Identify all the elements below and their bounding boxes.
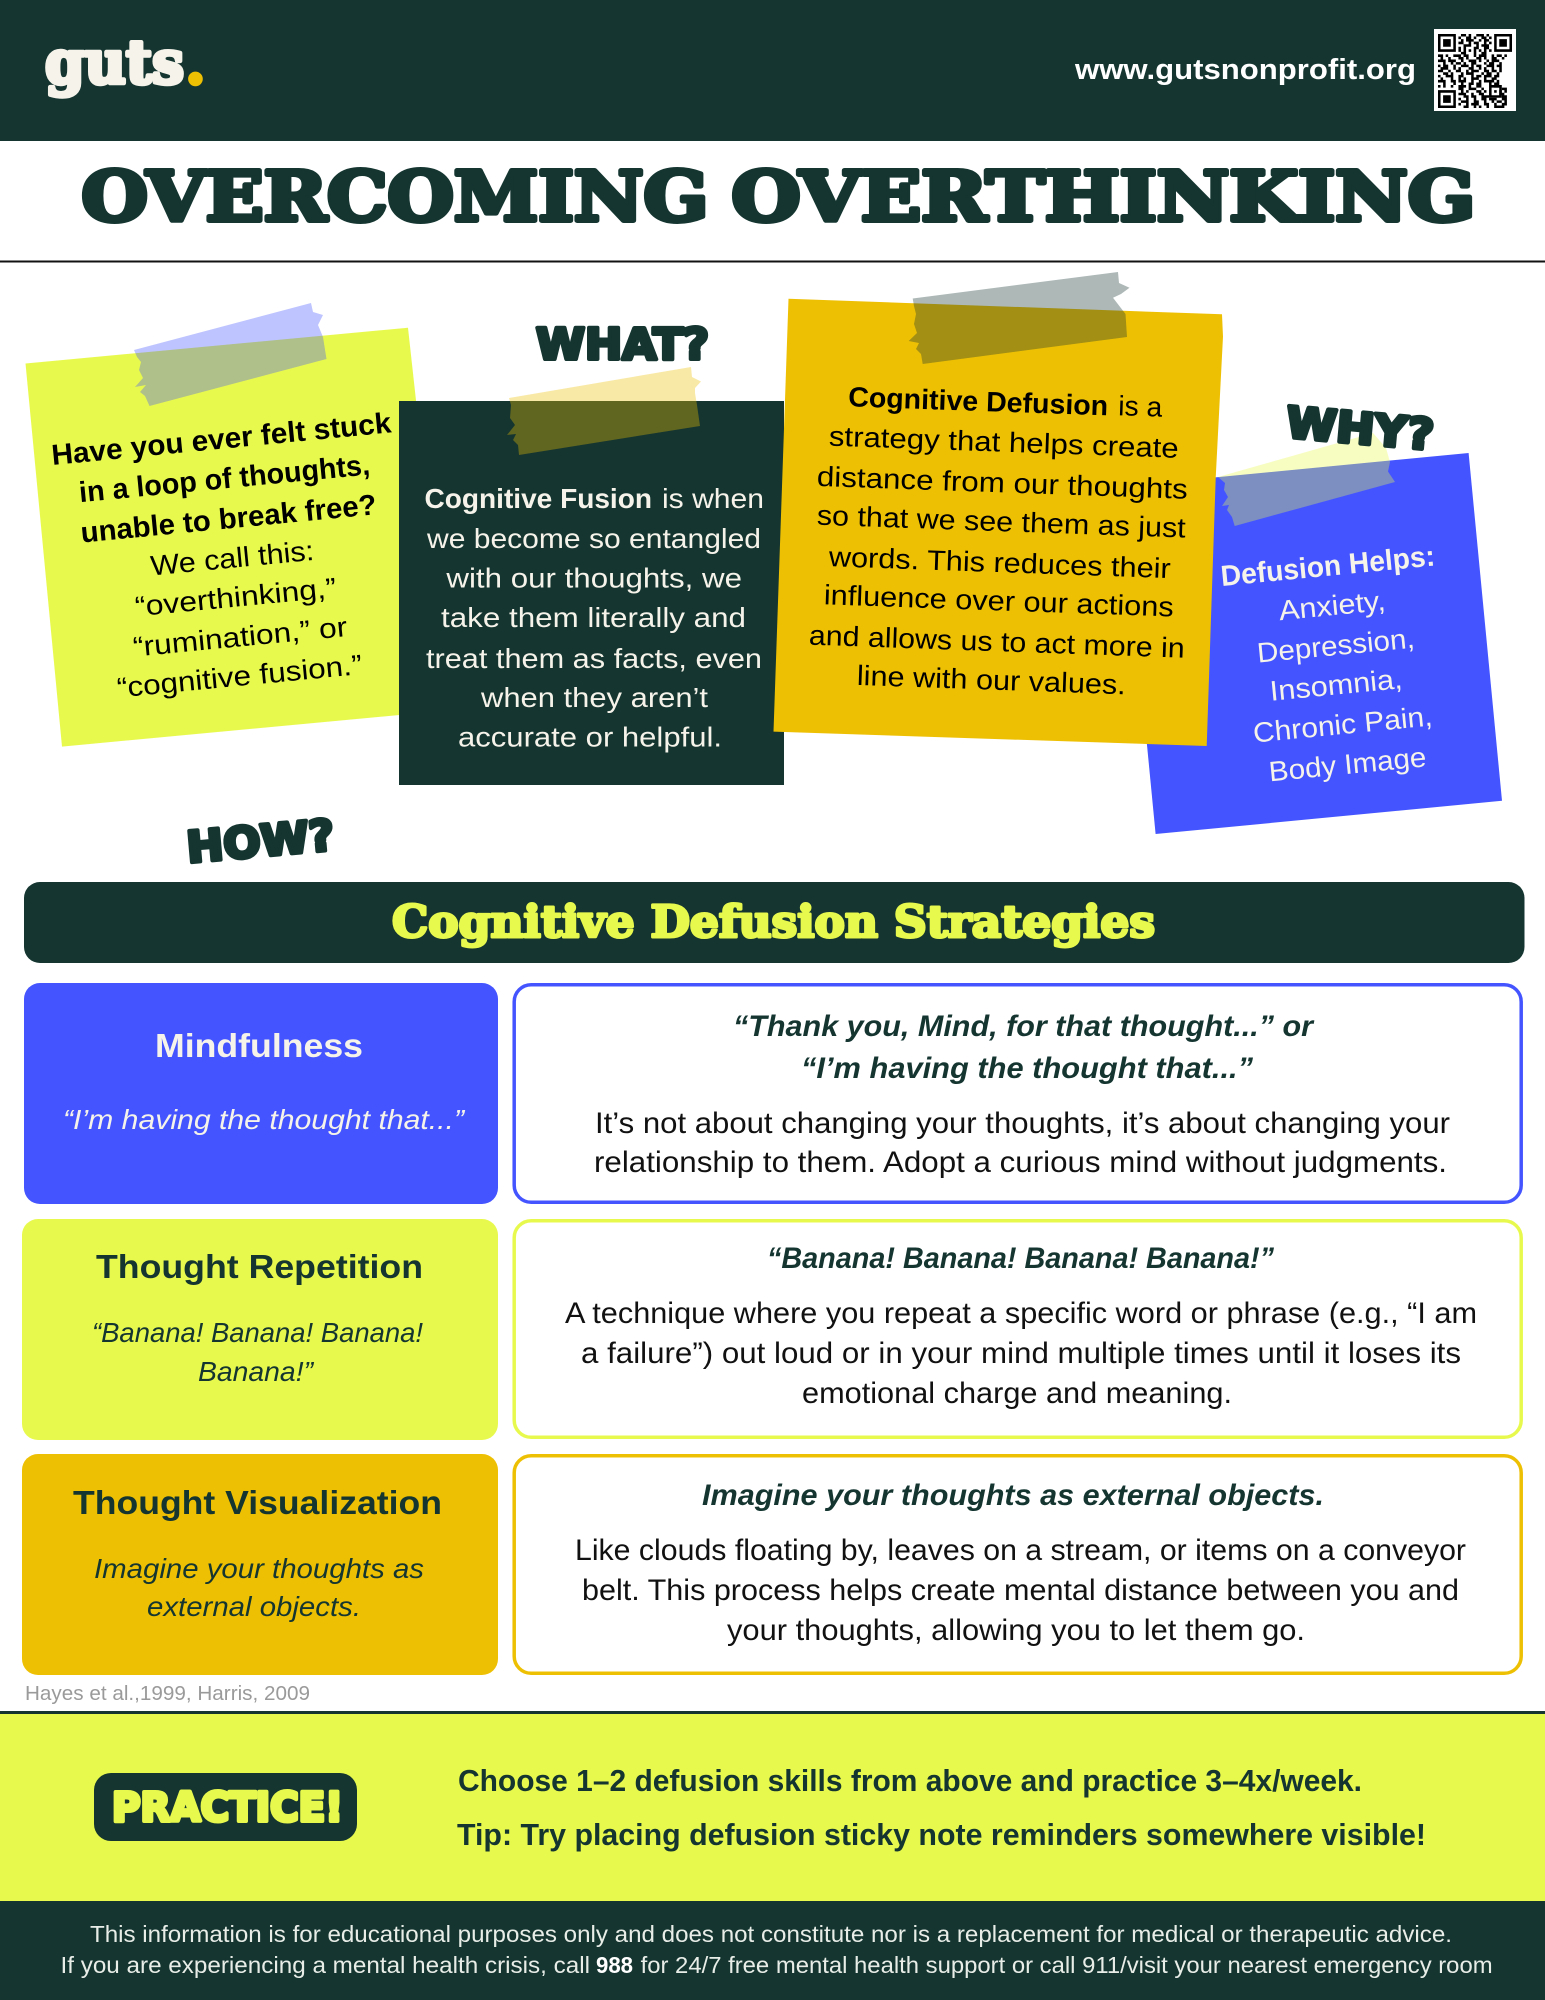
detail: thought repetition: a failure”) out loud or in your mind multiple times until it loses its <box>581 1337 1461 1370</box>
practice instructions: Choose 1–2 defusion skills from above and practice 3–4x/week. <box>458 1763 1362 1798</box>
card: thought repetition: “Banana! Banana! Banana! <box>92 1317 423 1348</box>
card: thought repetition <box>22 1219 498 1440</box>
card: thought repetition: Banana!” <box>198 1356 315 1387</box>
note text: “rumination,” or <box>132 611 349 663</box>
note text: in a loop of thoughts, <box>78 449 371 509</box>
detail: mindfulness: relationship to them. Adopt a curious mind without judgments. <box>594 1146 1447 1179</box>
note text: “cognitive fusion.” <box>116 649 363 703</box>
note text: Defusion Helps: <box>1219 541 1436 593</box>
note: cognitive defusion <box>774 272 1223 746</box>
note text: and allows us to act more in <box>808 620 1185 664</box>
title: OVERTHINKING <box>732 158 1476 238</box>
detail: thought repetition: emotional charge and meaning. <box>802 1377 1232 1410</box>
note text: Depression, <box>1256 623 1416 669</box>
card: mindfulness: Mindfulness <box>155 1027 363 1064</box>
heading: why: WHY? <box>1284 398 1436 461</box>
card: mindfulness <box>24 983 498 1204</box>
note text: when they aren’t <box>480 682 708 713</box>
banner: cognitive defusion strategies <box>24 882 1524 963</box>
footer disclaimer: for 24/7 free mental health support or call 911/visit your nearest emergency room <box>641 1952 1493 1978</box>
note text: Chronic Pain, <box>1252 700 1434 749</box>
header band <box>0 0 1545 141</box>
practice instructions <box>457 1763 1426 1852</box>
title: OVERCOMING <box>82 158 708 238</box>
detail: thought repetition: A technique where you repeat a specific word or phrase (e.g., “I am <box>565 1297 1477 1330</box>
title <box>82 158 1476 238</box>
detail: thought visualization <box>514 1456 1521 1673</box>
detail: thought visualization: Imagine your thoughts as external objects. <box>702 1479 1324 1512</box>
detail: thought repetition: “Banana! Banana! Banana! Banana!” <box>767 1242 1274 1275</box>
note text: so that we see them as just <box>816 500 1186 544</box>
note text: with our thoughts, we <box>445 562 742 593</box>
heading: what: WHAT? <box>536 320 709 370</box>
note text: Have you ever felt stuck <box>50 407 393 472</box>
note text: strategy that helps create <box>828 421 1179 464</box>
note: defusion helps <box>1122 433 1502 834</box>
tape: teal <box>909 272 1130 364</box>
note text: accurate or helpful. <box>458 722 722 753</box>
logo: guts: guts <box>45 28 184 98</box>
footer disclaimer <box>0 1901 1545 2000</box>
practice instructions: Tip: Try placing defusion sticky note reminders somewhere visible! <box>457 1817 1426 1852</box>
website url: www.gutsnonprofit.org <box>1074 54 1416 86</box>
note text: treat them as facts, even <box>426 643 762 674</box>
note text <box>424 483 764 753</box>
note text: Cognitive Defusion <box>848 381 1109 421</box>
detail: mindfulness <box>514 985 1521 1202</box>
footer disclaimer: 988 <box>596 1952 633 1978</box>
detail: mindfulness: “I’m having the thought that...” <box>801 1052 1253 1085</box>
note text: is a <box>1118 390 1163 423</box>
card: thought visualization: external objects. <box>147 1591 361 1622</box>
banner heading: Cognitive Defusion Strategies <box>392 897 1155 948</box>
note text: Body Image <box>1267 741 1428 787</box>
note text <box>1219 541 1436 787</box>
card: thought visualization: Imagine your thoughts as <box>94 1553 424 1584</box>
tape: gold <box>507 367 701 455</box>
card: mindfulness: “I’m having the thought that...” <box>63 1104 466 1135</box>
logo: guts: . <box>185 28 206 98</box>
tape: blue <box>134 303 326 406</box>
note text: unable to break free? <box>79 489 378 550</box>
card: thought repetition: Thought Repetition <box>96 1248 423 1285</box>
note text: take them literally and <box>441 602 746 633</box>
detail: thought visualization: belt. This process helps create mental distance between you and <box>582 1574 1459 1607</box>
note text: line with our values. <box>856 660 1126 700</box>
heading: how: HOW? <box>185 811 336 873</box>
citation: Hayes et al.,1999, Harris, 2009 <box>25 1682 310 1705</box>
card: thought visualization: Thought Visualization <box>73 1484 442 1521</box>
note text: influence over our actions <box>823 579 1174 623</box>
note text <box>808 381 1188 700</box>
note: cognitive fusion <box>399 367 784 785</box>
note text <box>50 407 393 703</box>
detail: thought visualization: your thoughts, allowing you to let them go. <box>727 1614 1305 1647</box>
note text: “overthinking,” <box>134 572 338 622</box>
footer disclaimer: If you are experiencing a mental health crisis, call <box>60 1952 590 1978</box>
note text: Insomnia, <box>1268 663 1404 707</box>
detail: mindfulness: “Thank you, Mind, for that thought...” or <box>733 1010 1315 1043</box>
detail: thought repetition <box>514 1221 1521 1437</box>
note text: words. This reduces their <box>827 541 1171 584</box>
detail: thought visualization: Like clouds floating by, leaves on a stream, or items on a conveyor <box>575 1534 1466 1567</box>
note: have you ever felt stuck <box>26 303 444 747</box>
icon: QR code <box>1434 29 1516 111</box>
note text: is when <box>662 483 764 514</box>
note text: We call this: <box>149 535 315 581</box>
panel: practice <box>0 1711 1545 1901</box>
tape: yellow <box>1218 433 1395 526</box>
footer disclaimer: This information is for educational purposes only and does not constitute nor is a replacement for medical or therapeutic advice. <box>90 1921 1452 1947</box>
card: thought visualization <box>22 1454 498 1675</box>
practice badge: PRACTICE! <box>112 1785 343 1831</box>
note text: Cognitive Fusion <box>424 483 652 514</box>
note text: distance from our thoughts <box>816 461 1188 505</box>
note text: we become so entangled <box>426 523 761 554</box>
practice badge <box>94 1773 357 1841</box>
note text: Anxiety, <box>1277 585 1387 626</box>
detail: mindfulness: It’s not about changing your thoughts, it’s about changing your <box>595 1107 1450 1140</box>
